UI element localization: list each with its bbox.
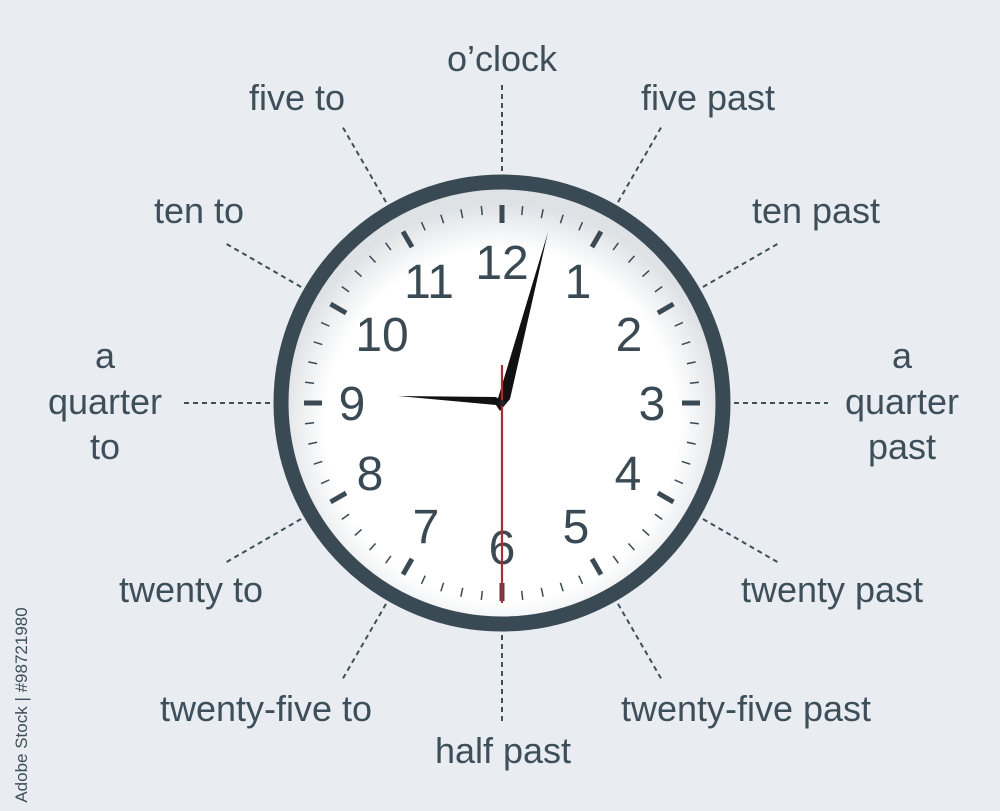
label: a quarter past: quarter (845, 381, 959, 422)
dashed connector lines (184, 85, 828, 721)
label: ten past: ten past (752, 190, 880, 231)
clock numbers: 11 (404, 256, 454, 309)
label: o'clock: o’clock (447, 38, 558, 79)
label: a quarter to: to (90, 426, 120, 467)
center pin (499, 400, 505, 406)
major ticks (304, 205, 700, 601)
clock numbers: 7 (413, 501, 439, 554)
clock numbers: 5 (563, 501, 589, 554)
clock numbers (339, 237, 665, 575)
label: five past: five past (641, 77, 775, 118)
clock numbers: 4 (615, 448, 641, 501)
label: twenty to: twenty to (119, 569, 263, 610)
minor ticks (305, 206, 699, 600)
hour hand (398, 396, 504, 405)
label: ten to: ten to (154, 190, 244, 231)
credit text: Adobe Stock | #98721980 (12, 607, 31, 803)
label: five to: five to (249, 77, 345, 118)
clock numbers: 1 (565, 256, 591, 309)
clock numbers: 8 (357, 448, 383, 501)
clock numbers: 2 (616, 309, 642, 362)
label: a quarter to: a (95, 335, 116, 376)
clock rim (281, 182, 723, 624)
label: a quarter to: quarter (48, 381, 162, 422)
clock numbers: 10 (355, 309, 409, 362)
label: a quarter past: a (892, 335, 913, 376)
clock numbers: 3 (639, 378, 665, 431)
clock (281, 182, 723, 624)
minute hand (496, 232, 548, 411)
label: half past: half past (435, 730, 571, 771)
clock numbers: 9 (339, 378, 365, 431)
label: twenty-five to: twenty-five to (160, 688, 372, 729)
label: twenty-five past: twenty-five past (621, 688, 871, 729)
label: twenty past: twenty past (741, 569, 923, 610)
clock numbers: 12 (475, 237, 529, 290)
clock numbers: 6 (489, 522, 515, 575)
label: a quarter past: past (868, 426, 936, 467)
second hand (501, 365, 503, 603)
